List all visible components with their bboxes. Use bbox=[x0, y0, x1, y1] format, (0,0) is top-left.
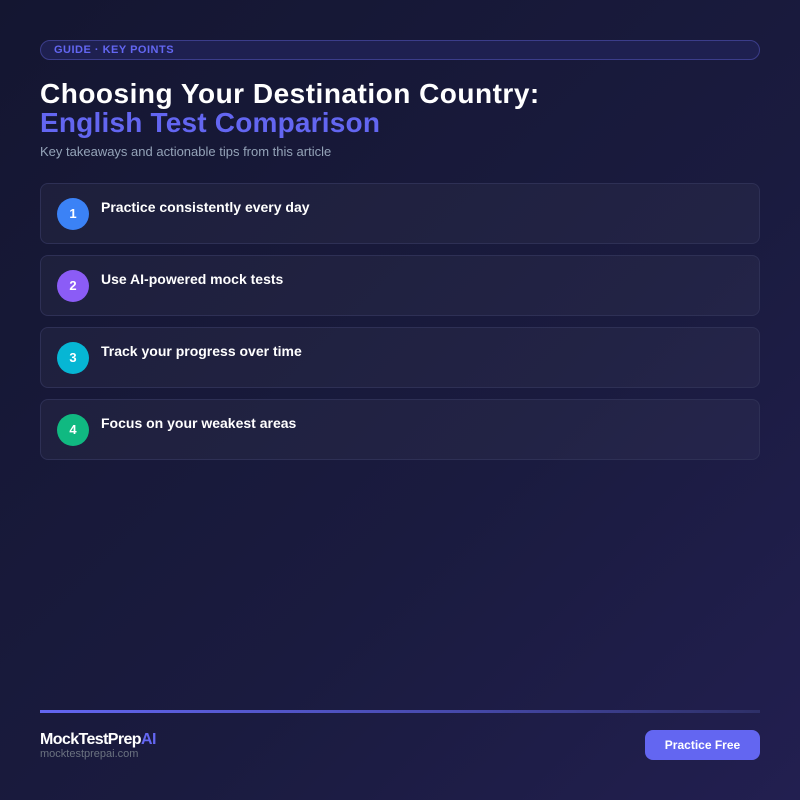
card 3 bbox=[40, 327, 760, 388]
number 3: 3 bbox=[69, 350, 77, 365]
number 3 bbox=[57, 342, 89, 374]
title: Choosing Your Destination Country: bbox=[40, 78, 540, 109]
card 4 bbox=[40, 399, 760, 460]
text 4: Focus on your weakest areas bbox=[101, 415, 296, 431]
text 3: Track your progress over time bbox=[101, 343, 302, 359]
card 2 bbox=[40, 255, 760, 316]
url: mocktestprepai.com bbox=[40, 748, 138, 760]
number 4 bbox=[57, 414, 89, 446]
number 2 bbox=[57, 270, 89, 302]
card 1 bbox=[40, 183, 760, 244]
number 1: 1 bbox=[69, 206, 77, 221]
text 1: Practice consistently every day bbox=[101, 199, 310, 215]
number 1 bbox=[57, 198, 89, 230]
badge: GUIDE · KEY POINTS bbox=[54, 44, 174, 56]
number 4: 4 bbox=[69, 422, 77, 437]
brand: MockTestPrepAI bbox=[40, 731, 156, 748]
button bbox=[645, 730, 760, 760]
number 2: 2 bbox=[69, 278, 77, 293]
subtitle: Key takeaways and actionable tips from this article bbox=[40, 144, 331, 159]
text 2: Use AI-powered mock tests bbox=[101, 271, 283, 287]
title accent: English Test Comparison bbox=[40, 107, 380, 138]
button: Practice Free bbox=[665, 738, 740, 752]
badge bbox=[40, 40, 760, 60]
